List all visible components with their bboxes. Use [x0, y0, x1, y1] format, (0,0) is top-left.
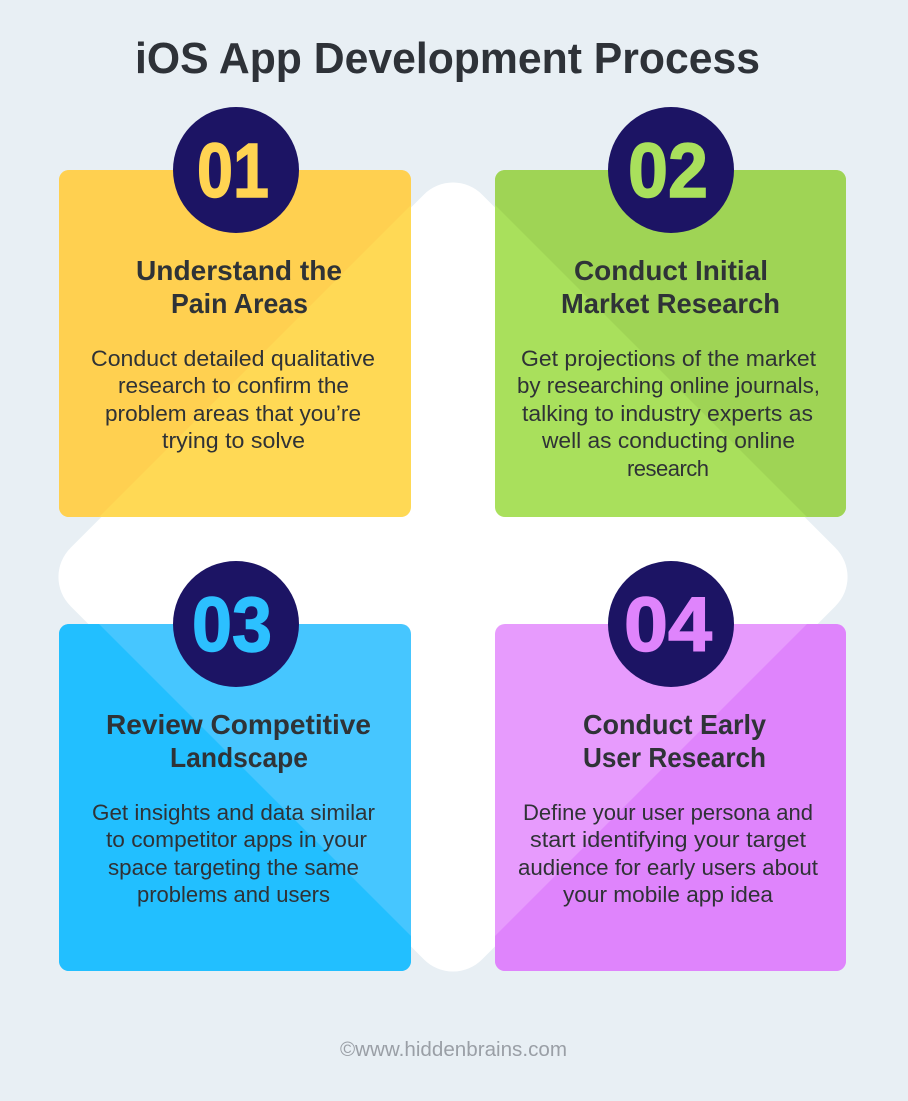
body text: well as conducting online [541, 428, 795, 453]
panel: step 03 review competitive landscape [59, 561, 411, 971]
body text [92, 800, 375, 907]
body text: by researching online journals, [517, 373, 820, 398]
heading [561, 255, 780, 319]
body text: Get insights and data similar [92, 800, 375, 825]
heading: Review Competitive [106, 709, 371, 740]
number badge 03 [173, 561, 299, 687]
title: iOS App Development Process [135, 34, 760, 83]
heading: Conduct Initial [574, 255, 768, 286]
heading: User Research [583, 742, 766, 773]
body text: trying to solve [162, 428, 305, 453]
heading: Pain Areas [171, 288, 308, 319]
card background [59, 170, 411, 517]
panel: step 01 understand the pain areas [59, 107, 411, 517]
body text: research to confirm the [118, 373, 349, 398]
heading [583, 709, 767, 773]
number badge 01: 01 [197, 128, 269, 214]
heading: Conduct Early [583, 709, 767, 740]
number badge 04: 04 [624, 582, 712, 668]
heading: Landscape [170, 742, 308, 773]
number badge 02 [608, 107, 734, 233]
body text [518, 800, 818, 907]
body text: start identifying your target [530, 827, 806, 852]
card background [495, 624, 846, 971]
white rounded diamond backdrop [41, 165, 865, 989]
body text: to competitor apps in your [106, 827, 367, 852]
heading [106, 709, 371, 773]
body text: Define your user persona and [523, 800, 813, 825]
body text: talking to industry experts as [522, 401, 813, 426]
body text: space targeting the same [108, 855, 359, 880]
body text: problems and users [137, 882, 330, 907]
number badge 04 [608, 561, 734, 687]
heading: Market Research [561, 288, 780, 319]
body text [91, 346, 375, 453]
card background [59, 624, 411, 971]
body text: Conduct detailed qualitative [91, 346, 375, 371]
panel: step 02 conduct initial market research [495, 107, 846, 517]
heading [136, 255, 342, 319]
body text: audience for early users about [518, 855, 818, 880]
number badge 03: 03 [192, 582, 272, 668]
footer credit: ©www.hiddenbrains.com [340, 1039, 567, 1061]
body text: research [627, 456, 709, 481]
body text: Get projections of the market [521, 346, 816, 371]
number badge 02: 02 [628, 128, 708, 214]
card background [495, 170, 846, 517]
heading: Understand the [136, 255, 342, 286]
number badge 01 [173, 107, 299, 233]
body text: your mobile app idea [563, 882, 774, 907]
panel: step 04 conduct early user research [495, 561, 846, 971]
body text: problem areas that you’re [105, 401, 361, 426]
body text [517, 346, 820, 481]
